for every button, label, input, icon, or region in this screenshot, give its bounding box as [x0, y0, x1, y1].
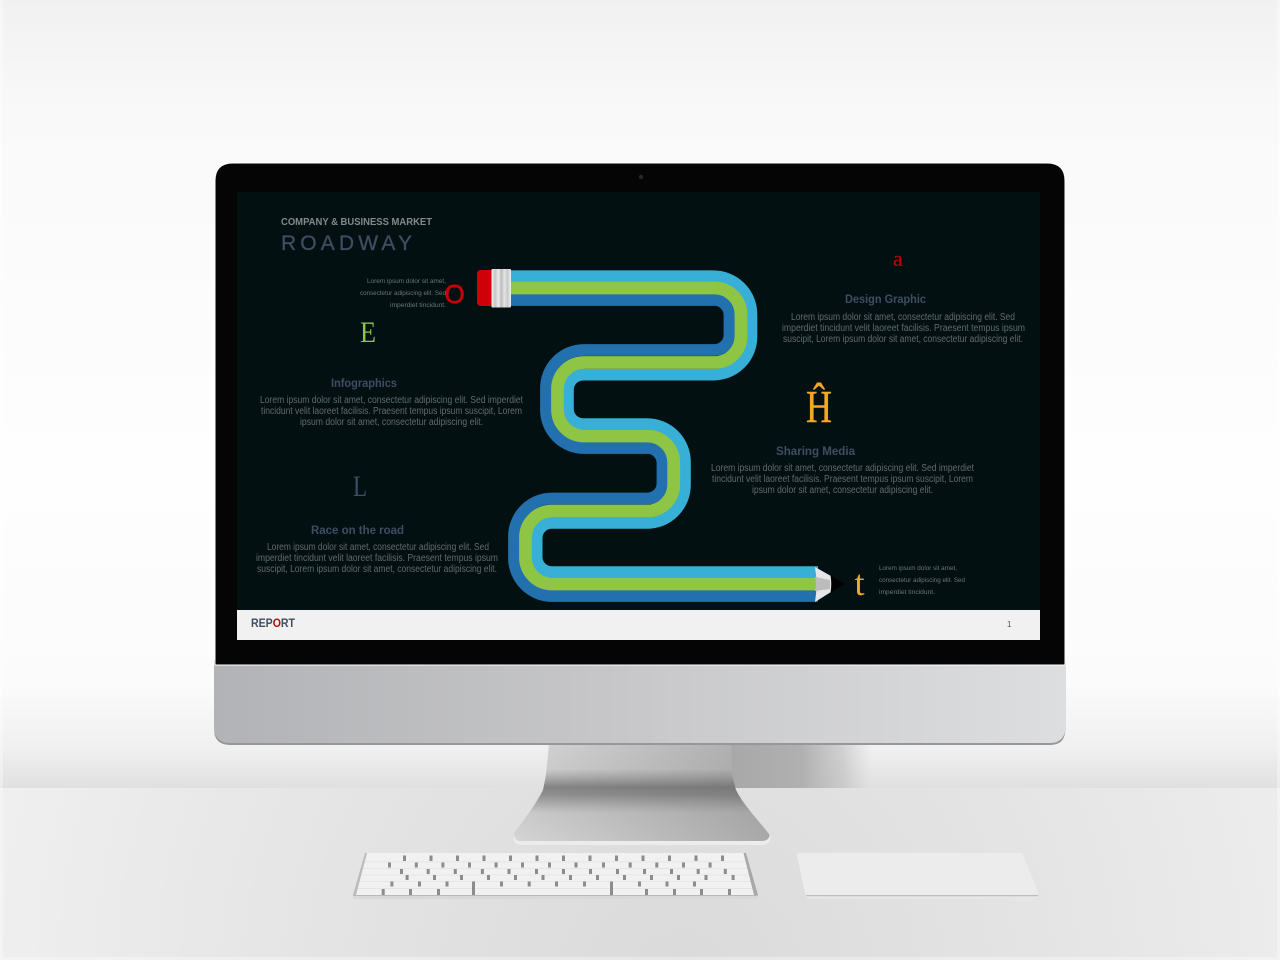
start note text: Lorem ipsum dolor sit amet,	[367, 278, 446, 285]
step: Race on the road	[256, 470, 498, 575]
body text: suscipit, Lorem ipsum dolor sit amet, consectetur adipiscing elit.	[257, 564, 497, 575]
body text: tincidunt velit laoreet facilisis. Praesent tempus ipsum suscipit, Lorem	[712, 474, 973, 485]
body text: Lorem ipsum dolor sit amet, consectetur adipiscing elit. Sed imperdiet	[260, 395, 523, 406]
end note text: imperdiet tincidunt.	[879, 589, 935, 596]
step: Design Graphic	[782, 246, 1025, 345]
desk surface	[0, 788, 1280, 960]
step: Infographics	[260, 316, 523, 428]
header kicker: COMPANY & BUSINESS MARKET	[281, 217, 432, 228]
end note text: Lorem ipsum dolor sit amet,	[879, 565, 957, 572]
eraser	[477, 270, 492, 306]
camera	[639, 175, 643, 179]
pencil road	[477, 269, 845, 602]
body text: Lorem ipsum dolor sit amet, consectetur adipiscing elit. Sed	[267, 542, 489, 553]
body text	[782, 312, 1025, 345]
start note text	[360, 278, 446, 309]
road stripe: light blue	[505, 276, 818, 572]
road stripe: dark blue	[505, 300, 818, 596]
body text: imperdiet tincidunt velit laoreet facilisis. Praesent tempus ipsum	[782, 323, 1025, 334]
body text: Lorem ipsum dolor sit amet, consectetur adipiscing elit. Sed imperdiet	[711, 463, 974, 474]
icon letter: H circumflex: Ĥ	[806, 381, 832, 432]
icon letter: t: t	[854, 563, 865, 603]
icon letter: E: E	[360, 316, 376, 349]
body text: suscipit, Lorem ipsum dolor sit amet, consectetur adipiscing elit.	[783, 334, 1023, 345]
icon letter: a: a	[893, 246, 903, 271]
body text: imperdiet tincidunt velit laoreet facilisis. Praesent tempus ipsum	[256, 553, 498, 564]
body text: tincidunt velit laoreet facilisis. Praesent tempus ipsum suscipit, Lorem	[261, 406, 522, 417]
step: end note	[854, 563, 965, 603]
end note text: consectetur adipiscing elit. Sed	[879, 577, 965, 584]
monitor stand	[513, 744, 770, 845]
body text: Lorem ipsum dolor sit amet, consectetur adipiscing elit. Sed	[791, 312, 1015, 323]
heading: Sharing Media	[776, 444, 855, 458]
heading: Race on the road	[311, 523, 404, 537]
road stripe: green	[505, 288, 818, 584]
body text	[711, 463, 974, 496]
body text	[260, 395, 523, 428]
stand shadow on wall	[730, 745, 872, 788]
heading: Infographics	[331, 376, 397, 390]
start note text: consectetur adipiscing elit. Sed	[360, 290, 446, 297]
pencil tip	[815, 567, 845, 602]
step: Sharing Media	[711, 381, 974, 496]
heading: Design Graphic	[845, 292, 926, 306]
icon letter: o: O	[444, 279, 465, 309]
end note text	[879, 565, 965, 596]
ferrule	[492, 269, 511, 308]
footer bar	[237, 610, 1040, 640]
monitor bezel	[215, 163, 1065, 665]
page number: 1	[1007, 620, 1012, 629]
footer label: REPORT	[251, 616, 296, 630]
trackpad	[797, 853, 1038, 899]
body text: ipsum dolor sit amet, consectetur adipiscing elit.	[300, 417, 483, 428]
body text: ipsum dolor sit amet, consectetur adipiscing elit.	[752, 485, 933, 496]
start note text: imperdiet tincidunt.	[390, 302, 446, 309]
monitor chin	[214, 660, 1066, 744]
keyboard	[353, 853, 758, 899]
screen background	[237, 192, 1040, 610]
header	[281, 217, 432, 255]
body text	[256, 542, 498, 575]
icon letter: L: L	[353, 470, 367, 503]
monitor	[214, 163, 1066, 745]
header title: ROADWAY	[281, 232, 412, 255]
step: start note	[360, 278, 465, 309]
